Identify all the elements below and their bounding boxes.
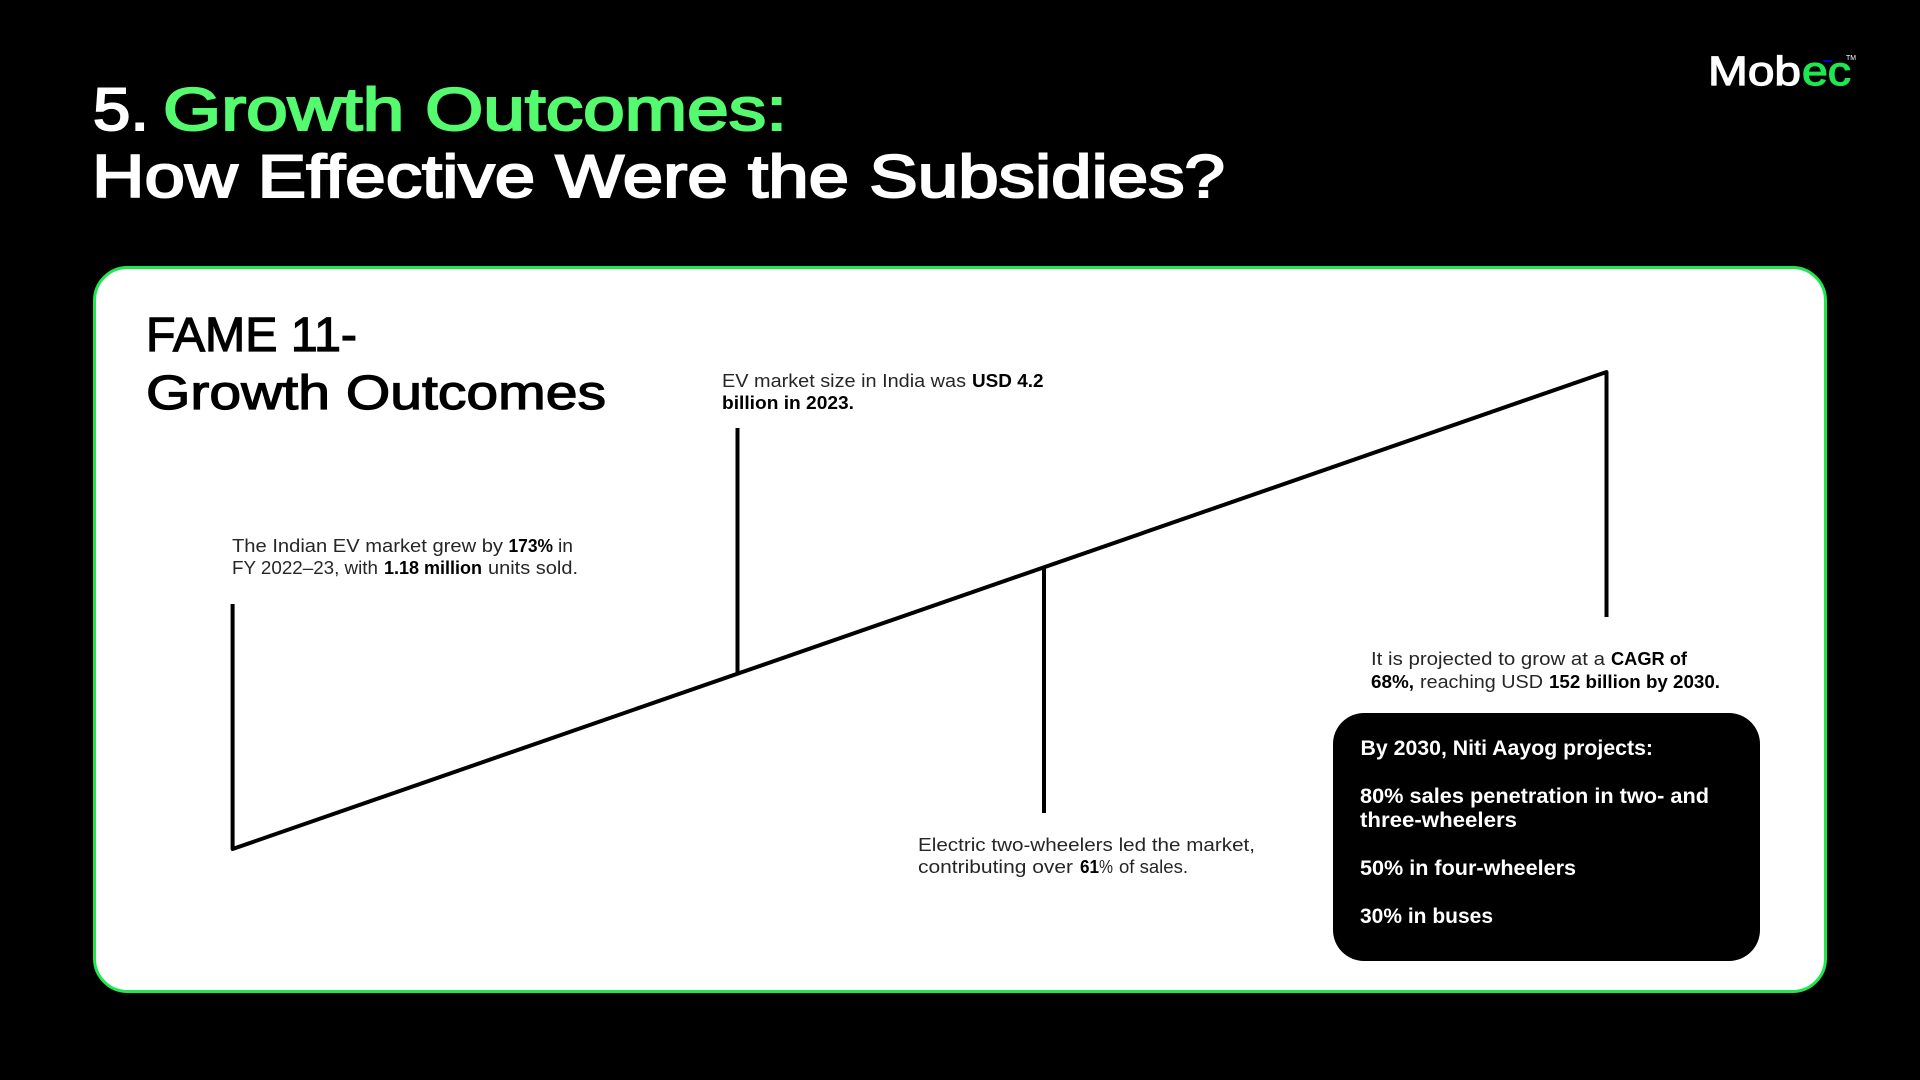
title: How Effective Were the Subsidies?: [92, 143, 1225, 210]
title: [92, 76, 1225, 210]
logo: Mobec: [1708, 48, 1856, 94]
text: two-wheelers 61%: 61: [1080, 856, 1099, 877]
text: market size USD 4.2 billion: billion in 2023.: [722, 392, 854, 413]
text: CAGR projection: [1371, 648, 1720, 692]
text: market growth 173%: 173%: [508, 535, 553, 556]
panel heading: Growth Outcomes: [146, 367, 606, 420]
text: two-wheelers 61%: contributing over: [918, 856, 1073, 877]
logo: Mobec: Mob: [1708, 48, 1801, 94]
callout: Niti Aayog projections: three-wheelers: [1360, 809, 1517, 832]
text: market growth 173%: in: [558, 535, 573, 556]
text: CAGR projection: CAGR of: [1611, 648, 1688, 669]
text: market growth 173%: 1.18 million: [384, 557, 482, 578]
text: market size USD 4.2 billion: [722, 370, 1044, 413]
text: two-wheelers 61%: of sales.: [1119, 856, 1188, 877]
callout: Niti Aayog projections: By 2030, Niti Aayog projects:: [1360, 737, 1653, 760]
text: two-wheelers 61%: [918, 834, 1255, 877]
text: two-wheelers 61%: %: [1099, 856, 1113, 877]
text: market size USD 4.2 billion: USD 4.2: [972, 370, 1044, 391]
text: market growth 173%: units sold.: [488, 557, 578, 578]
panel heading: FAME 11-: [146, 309, 357, 362]
logo: Mobec: ec: [1802, 48, 1851, 94]
callout: Niti Aayog projections: 50% in four-wheelers: [1360, 857, 1576, 880]
growth line chart: [233, 372, 1607, 849]
panel: growth outcomes: [94, 268, 1826, 992]
text: market growth 173%: The Indian EV market grew by: [232, 535, 504, 556]
text: CAGR projection: It is projected to grow at a: [1371, 648, 1606, 669]
callout: Niti Aayog projections: 30% in buses: [1360, 905, 1493, 928]
text: CAGR projection: 152 billion by 2030.: [1549, 671, 1720, 692]
title: 5.: [93, 76, 149, 143]
text: CAGR projection: 68%,: [1371, 671, 1414, 692]
logo: Mobec: TM: [1846, 55, 1856, 62]
panel heading: [146, 309, 606, 420]
title: Growth Outcomes:: [163, 76, 787, 143]
text: two-wheelers 61%: Electric two-wheelers led the market,: [918, 834, 1255, 855]
callout: Niti Aayog projections: 80% sales penetration in two- and: [1360, 785, 1709, 808]
text: CAGR projection: reaching USD: [1420, 671, 1543, 692]
text: market growth 173%: FY 2022–23, with: [232, 557, 378, 578]
text: market growth 173%: [232, 535, 578, 578]
callout: Niti Aayog projections: [1333, 713, 1760, 961]
text: market size USD 4.2 billion: EV market size in India was: [722, 370, 966, 391]
